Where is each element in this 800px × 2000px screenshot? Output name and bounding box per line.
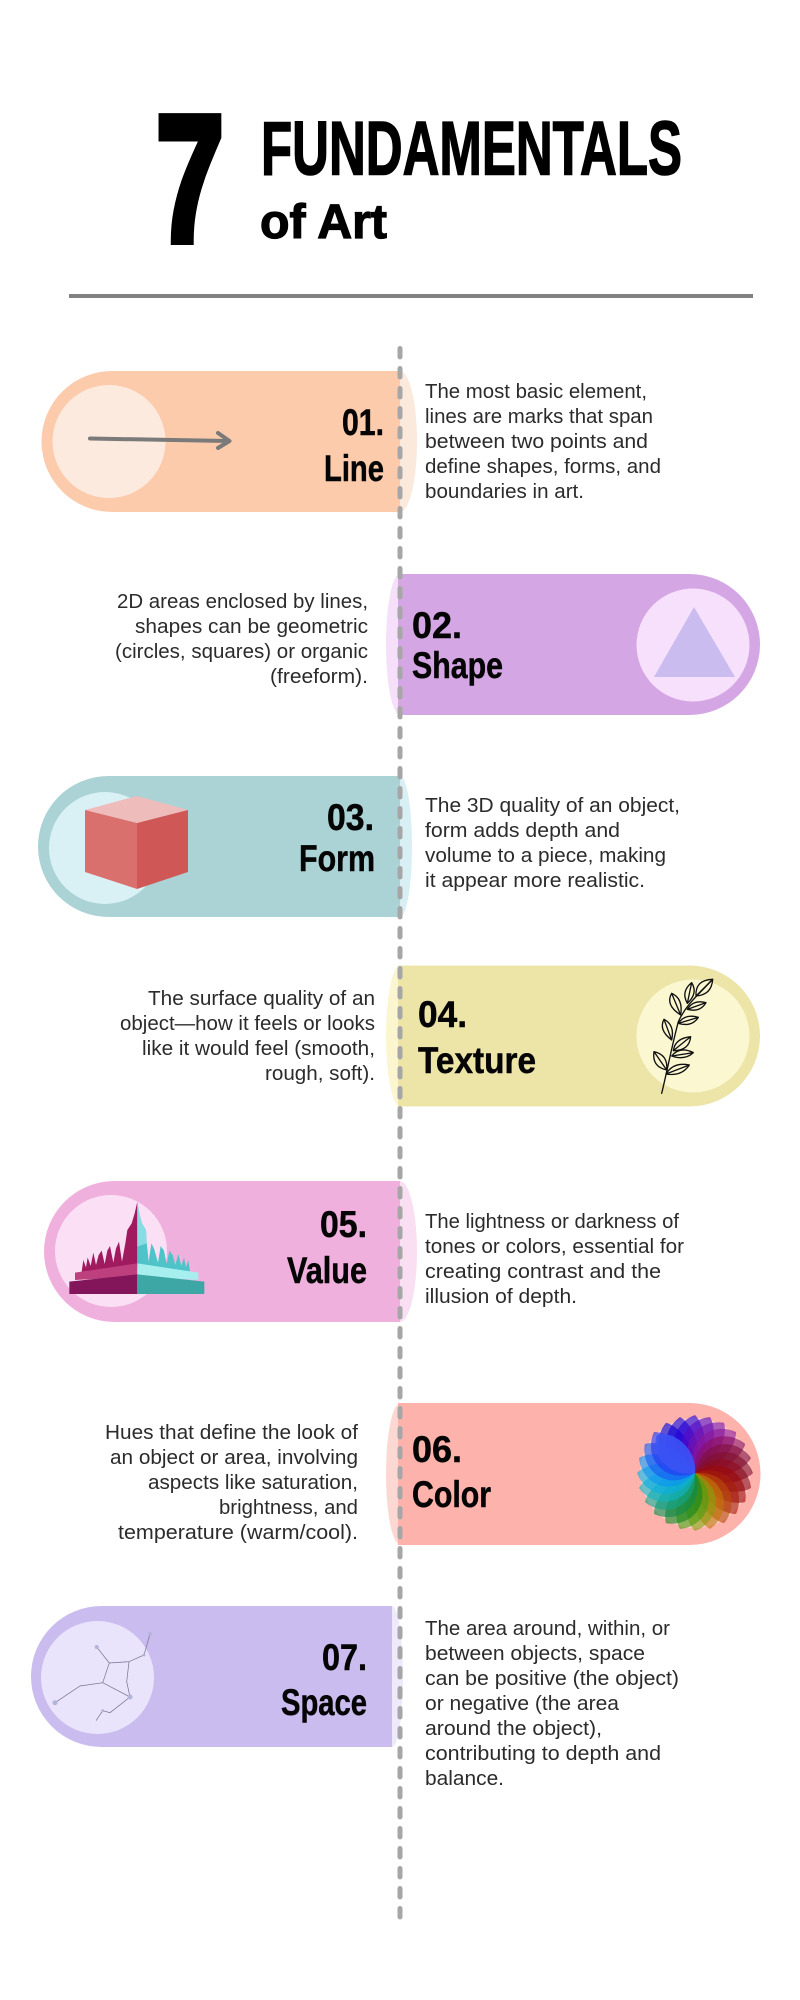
text: line description: define shapes, forms, and bbox=[425, 456, 661, 478]
text: shape description: (circles, squares) or organic bbox=[115, 641, 368, 663]
panel: 05 value: 05. bbox=[320, 1204, 367, 1245]
panel: 06 color bbox=[105, 1403, 760, 1545]
panel: 01 line: 01. bbox=[342, 402, 384, 443]
text: texture description: rough, soft). bbox=[265, 1063, 375, 1085]
text: value description bbox=[425, 1211, 684, 1308]
text: line description: between two points and bbox=[425, 431, 648, 453]
text: shape description: 2D areas enclosed by lines, bbox=[117, 591, 368, 613]
text: space description: around the object), bbox=[425, 1718, 602, 1740]
text: space description: or negative (the area bbox=[425, 1693, 620, 1715]
text: color description: Hues that define the look of bbox=[105, 1422, 358, 1444]
panel: 01 line: Line bbox=[324, 448, 384, 489]
text: form description: volume to a piece, making bbox=[425, 845, 666, 867]
text: shape description: (freeform). bbox=[270, 666, 368, 688]
text: value description: tones or colors, essential for bbox=[425, 1236, 684, 1258]
text: space description: between objects, space bbox=[425, 1643, 645, 1665]
text: texture description: object—how it feels or looks bbox=[120, 1013, 375, 1035]
icon: cube bbox=[85, 796, 188, 889]
panel: 01 line bbox=[41, 371, 661, 512]
text: form description: it appear more realistic. bbox=[425, 870, 645, 892]
panel: 04 texture: 04. bbox=[418, 994, 467, 1035]
text: color description: temperature (warm/cool). bbox=[118, 1522, 358, 1544]
panel: 06 color: 06. bbox=[412, 1429, 462, 1470]
panel: 05 value: Value bbox=[287, 1250, 367, 1291]
text: form description: The 3D quality of an object, bbox=[425, 795, 680, 817]
panel: 07 space: 07. bbox=[322, 1637, 367, 1678]
icon: constellation bbox=[52, 1632, 152, 1721]
icon: colour wheel bbox=[634, 1412, 756, 1534]
text: space description: balance. bbox=[425, 1768, 504, 1790]
panel: 04 texture bbox=[120, 966, 760, 1106]
text: space description: can be positive (the object) bbox=[425, 1668, 679, 1690]
text: texture description: like it would feel (smooth, bbox=[142, 1038, 375, 1060]
title: of Art bbox=[260, 196, 387, 249]
text: form description bbox=[425, 795, 680, 892]
panel: 03 form bbox=[38, 776, 680, 917]
panel: 02 shape: Shape bbox=[412, 645, 503, 686]
title bbox=[156, 79, 682, 280]
timeline: dashed vertical line bbox=[398, 348, 402, 1920]
panel: 07 space: Space bbox=[281, 1682, 367, 1723]
text: color description: brightness, and bbox=[219, 1497, 358, 1519]
panel: 07 space bbox=[31, 1606, 679, 1790]
panel: 06 color: Color bbox=[412, 1474, 491, 1515]
text: space description: contributing to depth and bbox=[425, 1743, 661, 1765]
text: value description: The lightness or darkness of bbox=[425, 1211, 679, 1233]
text: line description: The most basic element, bbox=[425, 381, 647, 403]
icon: temple bbox=[69, 1202, 204, 1294]
text: shape description bbox=[115, 591, 368, 688]
text: value description: creating contrast and the bbox=[425, 1261, 661, 1283]
text: space description: The area around, within, or bbox=[425, 1618, 670, 1640]
text: texture description: The surface quality of an bbox=[148, 988, 375, 1010]
text: value description: illusion of depth. bbox=[425, 1286, 577, 1308]
icon: triangle bbox=[654, 607, 735, 677]
text: form description: form adds depth and bbox=[425, 820, 620, 842]
text: line description bbox=[425, 381, 661, 503]
panel: 04 texture: Texture bbox=[418, 1040, 536, 1081]
text: space description bbox=[425, 1618, 679, 1790]
panel: 02 shape bbox=[115, 574, 760, 715]
icon: leaf sprig bbox=[654, 979, 713, 1093]
icon: arrow bbox=[90, 433, 230, 448]
panel: 03 form: 03. bbox=[327, 797, 374, 838]
text: texture description bbox=[120, 988, 375, 1085]
text: shape description: shapes can be geometric bbox=[135, 616, 368, 638]
panel: 02 shape: 02. bbox=[412, 605, 462, 646]
text: line description: boundaries in art. bbox=[425, 481, 584, 503]
panel: 05 value bbox=[44, 1181, 684, 1322]
text: line description: lines are marks that span bbox=[425, 406, 653, 428]
text: color description: aspects like saturation, bbox=[148, 1472, 358, 1494]
text: color description bbox=[105, 1422, 358, 1544]
text: color description: an object or area, involving bbox=[110, 1447, 358, 1469]
panel: 03 form: Form bbox=[299, 838, 375, 879]
title: 7 bbox=[156, 79, 224, 280]
